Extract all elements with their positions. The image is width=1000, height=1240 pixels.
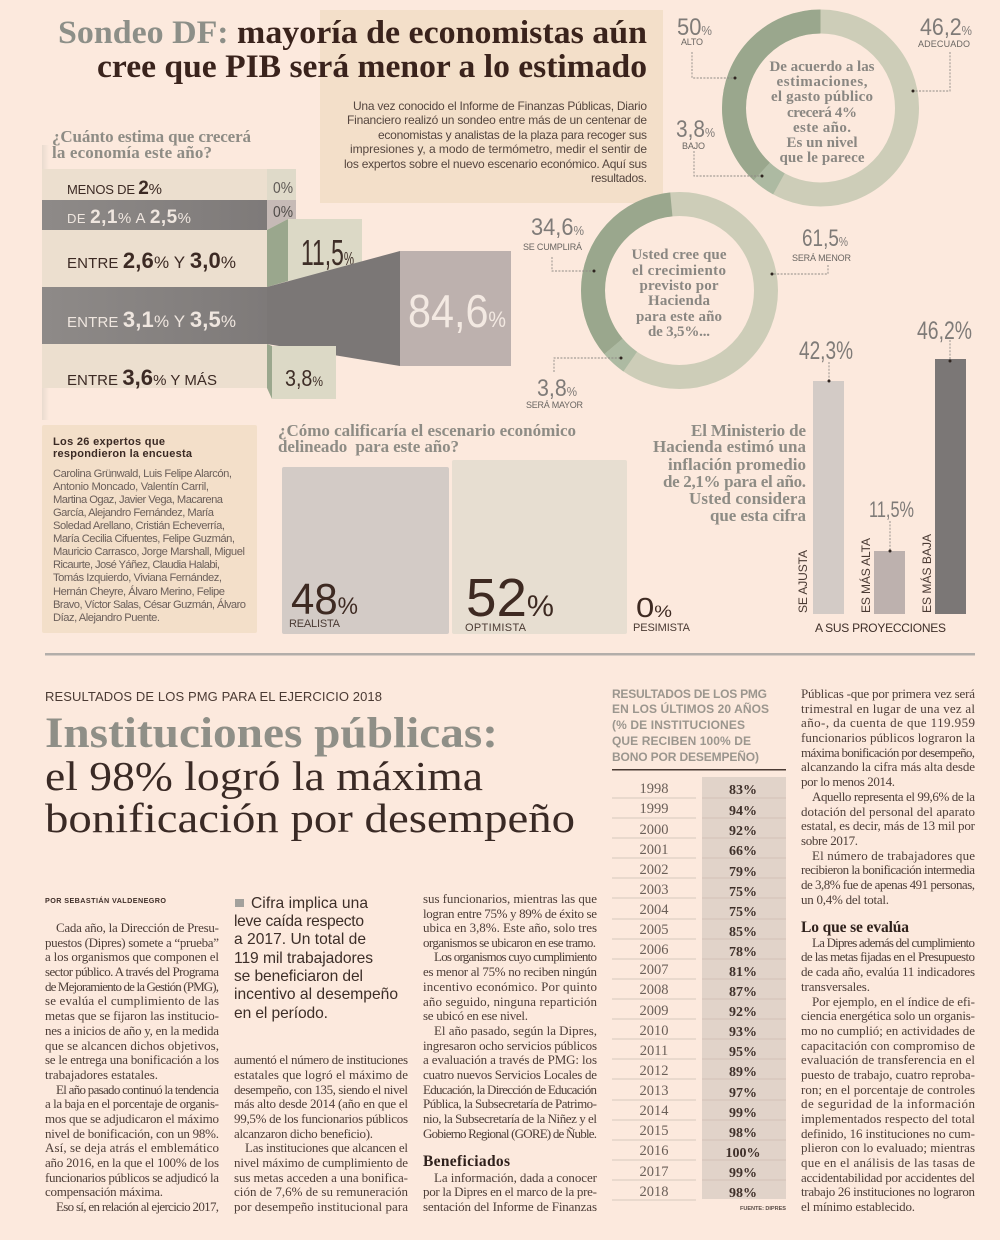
table values: 93% [729, 1025, 757, 1040]
expertos names [53, 468, 246, 624]
article column 4: recibieron la bonificación intermedia [801, 862, 975, 877]
panel: intro box [320, 10, 663, 203]
table years: 2011 [640, 1043, 668, 1059]
table values: 98% [729, 1186, 757, 1201]
article column 4: el mínimo establecido. [801, 1199, 915, 1214]
donut centre text: previsto por [640, 278, 719, 294]
article column 3: ubica en 3,8%. Este año, solo tres [423, 920, 597, 935]
article column 4: Aquello representa el 99,6% de la [812, 789, 975, 804]
article column 4: de seguridad de la información [801, 1096, 976, 1111]
article column 4: mo no cumplió; en actividades de [801, 1023, 975, 1038]
byline: POR SEBASTIÁN VALDENEGRO [45, 896, 166, 905]
expertos names: Mauricio Carrasco, Jorge Marshall, Miguel [53, 546, 245, 558]
article column 4: estatal, es decir, más de 13 mil por [801, 818, 976, 833]
intro text: resultados. [591, 171, 647, 185]
article column 4: funcionarios públicos lograron la [801, 730, 975, 745]
bar: se ajusta [796, 337, 853, 614]
label: pesimista: 0% [636, 592, 672, 623]
table heading [612, 687, 769, 764]
bar: es más alta: 11,5% [869, 497, 914, 522]
row: 2,1 a 2,5: 0% [273, 204, 293, 221]
label: será mayor [526, 375, 584, 410]
article column 2 [234, 1052, 408, 1214]
table heading: (% DE INSTITUCIONES [612, 718, 745, 732]
donut centre text: Usted cree que [632, 247, 727, 263]
article column 4: de 3,8% fue de apenas 491 personas, [801, 877, 975, 892]
article column 4: El número de trabajadores que [812, 848, 975, 863]
article column 3: cuatro nuevos Servicios Locales de [423, 1067, 597, 1082]
article column 4: sobre 2017. [801, 833, 858, 848]
table heading: RESULTADOS DE LOS PMG [612, 687, 767, 701]
leader lines [552, 257, 828, 372]
row: 3,1 y 3,5: ENTRE 3,1% Y 3,5% [67, 307, 236, 332]
article column 2: Las instituciones que alcancen el [245, 1140, 408, 1155]
donut centre text: Es un nivel [786, 135, 858, 151]
headline: el 98% logró la máxima [45, 753, 483, 799]
article column 4: por lo menos 2014. [801, 774, 895, 789]
title [58, 15, 647, 85]
row: 3,6 y más [42, 344, 336, 399]
expertos heading [53, 436, 193, 460]
bar: es más baja: ES MÁS BAJA [919, 534, 934, 613]
label: se cumplirá: SE CUMPLIRÁ [523, 242, 582, 252]
table values: 79% [729, 865, 757, 880]
donut centre text: De acuerdo a las [770, 59, 875, 75]
label: se cumplirá: 34,6% [531, 214, 584, 241]
callout: 119 mil trabajadores [234, 950, 373, 967]
article column 4 [801, 686, 976, 1214]
label: será menor: 61,5% [802, 225, 848, 252]
article column 3: se ubicó en ese nivel. [423, 1008, 528, 1023]
expertos names: García, Alejandro Fernández, María [53, 507, 215, 519]
row: 2,1 a 2,5 [42, 200, 296, 230]
callout: leve caída respecto [234, 913, 364, 930]
heading: inflation question [653, 421, 806, 525]
expertos names: María Cecilia Cifuentes, Felipe Guzmán, [53, 533, 235, 545]
table years [640, 781, 669, 1200]
box: optimista [452, 460, 627, 634]
article column 1: compensación máxima. [45, 1184, 163, 1199]
table values: 78% [729, 945, 757, 960]
table years: 2014 [640, 1103, 669, 1119]
article column 1: sector público. A través del Programa [45, 964, 219, 979]
table years: 2016 [640, 1143, 668, 1159]
donut centre text: el crecimiento [632, 263, 726, 279]
table values: 97% [729, 1086, 757, 1101]
table years: 2001 [640, 842, 668, 858]
article column 4: Por ejemplo, en el índice de efi- [812, 994, 975, 1009]
article column 1: a los organismos que componen el [45, 949, 219, 964]
bar: es más alta [858, 497, 914, 614]
table heading: BONO POR DESEMPEÑO) [612, 749, 759, 764]
table years: 1999 [640, 801, 668, 817]
row: 3,1 y 3,5 [42, 251, 511, 366]
table years: 2013 [640, 1083, 668, 1099]
table years: 2008 [640, 982, 668, 998]
box: realista: REALISTA [289, 618, 341, 630]
expertos heading: Los 26 expertos que [53, 436, 165, 448]
label: alto: ALTO [681, 37, 703, 47]
label: alto: 50% [677, 14, 712, 41]
article column 4: alcanzando la cifra más alta desde [801, 759, 975, 774]
article column 1: Cada año, la Dirección de Presu- [56, 920, 219, 935]
title: cree que PIB será menor a lo estimado [97, 49, 647, 85]
donut centre text: crecerá 4% [787, 105, 857, 121]
box: realista: 48% [291, 575, 358, 624]
article column 1 [45, 920, 219, 1214]
table values: 98% [729, 1126, 757, 1141]
table heading: QUE RECIBEN 100% DE [612, 734, 751, 748]
expertos names: Hernán Cheyre, Álvaro Merino, Felipe [53, 585, 225, 598]
table values: 75% [729, 885, 757, 900]
article column 4: año-, da cuenta de que 119.959 [801, 715, 975, 730]
article column 4: Lo que se evalúa [801, 919, 909, 936]
label: adecuado: 46,2% [920, 14, 972, 41]
article column 4: plieron con lo evaluado; mientras [801, 1140, 975, 1155]
expertos names: Ricaurte, José Yáñez, Claudia Halabi, [53, 559, 220, 571]
article column 2: sus metas acceden a una bonifica- [234, 1170, 408, 1185]
article column 3: año seguido, ninguna repartición [423, 994, 598, 1009]
table: resultados PMG [612, 687, 786, 1212]
row: 3,1 y 3,5: 84,6% [408, 285, 506, 337]
donut centre text: Hacienda [648, 293, 710, 309]
table values: 75% [729, 905, 757, 920]
row: 2,6 y 3,0 [42, 219, 362, 287]
table years: 2009 [640, 1003, 668, 1019]
article column 3: Beneficiados [423, 1153, 510, 1170]
article column 2: desempeño, con 135, siendo el nivel [234, 1082, 408, 1097]
label: será menor [792, 225, 852, 263]
intro text: economistas y analistas de la plaza para recoger sus [378, 128, 647, 142]
donut centre text: estimaciones, [776, 74, 868, 90]
donut centre text: para este año [636, 309, 722, 325]
donut centre text [770, 59, 875, 166]
article column 4: implementados respecto del total [801, 1111, 975, 1126]
article column 3: sentación del Informe de Finanzas [423, 1199, 597, 1214]
article column 4: trabajo 26 instituciones no lograron [801, 1184, 976, 1199]
heading: inflation question: que esta cifra [710, 506, 806, 525]
heading: scenario question [278, 421, 576, 456]
article column 3 [423, 891, 598, 1214]
expertos names: Díaz, Alejandro Puente. [53, 612, 160, 624]
headline [45, 710, 575, 841]
label: adecuado: ADECUADO [918, 39, 970, 49]
chart: scenario area bars [282, 460, 691, 634]
label: pesimista: PESIMISTA [633, 622, 691, 634]
expertos names: Bravo, Víctor Salas, César Guzmán, Álvaro [53, 598, 246, 611]
chart: inflation bars [796, 317, 972, 635]
article column 3: El año pasado, según la Dipres, [434, 1023, 597, 1038]
article column 4: ciencia energética solo un organis- [801, 1008, 975, 1023]
table values: 92% [729, 824, 757, 839]
table years: 2015 [640, 1123, 668, 1139]
article column 1: mos que se adjudicaron el máximo [45, 1111, 219, 1126]
label: pesimista [633, 592, 691, 634]
chart: donut gasto público [676, 14, 972, 194]
heading: growth question: ¿Cuánto estima que crecerá [52, 127, 252, 146]
kicker: RESULTADOS DE LOS PMG PARA EL EJERCICIO 2018 [45, 689, 382, 704]
article column 1: nes a inicios de año y, en la medida [45, 1023, 219, 1038]
table values: 81% [729, 965, 757, 980]
article column 4: de las metas fijadas en el Presupuesto [801, 949, 975, 964]
article column 3: Educación, la Dirección de Educación [423, 1082, 598, 1097]
expertos names: Martina Ogaz, Javier Vega, Macarena [53, 494, 224, 506]
expertos names: Carolina Grünwald, Luis Felipe Alarcón, [53, 468, 232, 480]
article column 3: logran entre 75% y 89% de éxito se [423, 906, 597, 921]
table years: 2017 [640, 1164, 668, 1180]
article column 3: organismos se ubicaron en ese tramo. [423, 935, 596, 950]
row: menos de 2% [42, 169, 296, 200]
bar: se ajusta: 42,3% [799, 337, 853, 365]
article column 3: Los organismos cuyo cumplimiento [434, 949, 597, 964]
table years: 2012 [640, 1063, 668, 1079]
table heading: EN LOS ÚLTIMOS 20 AÑOS [612, 701, 769, 716]
table years: 2006 [640, 942, 668, 958]
article column 2: 99,5% de los funcionarios públicos [234, 1111, 408, 1126]
donut centre text: el gasto público [771, 89, 873, 105]
row: 2,6 y 3,0: 11,5% [301, 232, 354, 273]
table values: 95% [729, 1045, 757, 1060]
callout [234, 895, 398, 1022]
expertos heading: respondieron la encuesta [53, 448, 193, 460]
article column 2: alcanzaron dicho beneficio). [234, 1126, 373, 1141]
intro text: Financiero realizó un sondeo entre más de un centenar de [347, 113, 647, 127]
box: optimista: OPTIMISTA [465, 622, 527, 634]
heading: scenario question: delineado para este año? [278, 437, 459, 456]
label: será menor: SERÁ MENOR [792, 253, 852, 263]
article column 2: nivel máximo de cumplimiento de [234, 1155, 408, 1170]
left shadow [42, 145, 49, 420]
article column 3: ingresaron ocho servicios públicos [423, 1038, 597, 1053]
table values: 66% [729, 844, 757, 859]
callout: se beneficiaron del [234, 968, 363, 985]
article column 1: El año pasado continuó la tendencia [56, 1082, 219, 1097]
article column 2: aumentó el número de instituciones [234, 1052, 408, 1067]
label: será mayor: SERÁ MAYOR [526, 400, 584, 410]
row: 2,1 a 2,5: DE 2,1% A 2,5% [67, 207, 191, 228]
bar: se ajusta: SE AJUSTA [796, 550, 810, 613]
article column 1: se evalúa el cumplimiento de las [45, 993, 219, 1008]
article column 4: definido, 16 instituciones no cum- [801, 1126, 975, 1141]
table years: 2002 [640, 862, 668, 878]
bar: es más baja [917, 317, 972, 614]
intro text: Una vez conocido el Informe de Finanzas Públicas, Diario [353, 99, 647, 113]
article column 3: La información, dada a conocer [434, 1170, 598, 1185]
row: 3,6 y más: ENTRE 3,6% Y MÁS [67, 365, 217, 390]
heading: inflation question: El Ministerio de [691, 421, 806, 440]
article column 4: máxima bonificación por desempeño, [801, 745, 975, 760]
table values: 92% [729, 1005, 757, 1020]
article column 1: se le entrega una bonificación a los [45, 1052, 219, 1067]
table values: 99% [729, 1166, 757, 1181]
article column 3: es menor al 75% no reciben ningún [423, 964, 598, 979]
table values: 100% [726, 1146, 760, 1161]
table years: 2003 [640, 882, 668, 898]
expertos names: Tomás Izquierdo, Viviana Fernández, [53, 572, 222, 584]
donut centre text [632, 247, 727, 340]
article column 1: nivel de bonificación, con un 98%. [45, 1126, 219, 1141]
table source: FUENTE: DIPRES [740, 1206, 786, 1212]
bar: es más alta: ES MÁS ALTA [858, 538, 873, 613]
intro text: los expertos sobre el nuevo escenario económico. Aquí sus [344, 157, 647, 171]
label: se cumplirá [523, 214, 584, 252]
table years: 2000 [640, 822, 668, 838]
row: 2,6 y 3,0: ENTRE 2,6% Y 3,0% [67, 248, 236, 273]
article column 1: puestos (Dipres) somete a “prueba” [45, 935, 219, 950]
row: menos de 2%: MENOS DE 2% [67, 178, 162, 199]
expertos names: Antonio Moncado, Valentín Carril, [53, 481, 209, 493]
callout: a 2017. Un total de [234, 931, 366, 948]
article column 3: incentivo económico. Por quinto [423, 979, 597, 994]
article column 3: Gobierno Regional (GORE) de Ñuble. [423, 1126, 597, 1141]
table values: 83% [729, 783, 757, 798]
table values: 87% [729, 985, 757, 1000]
article column 4: evaluación de transferencia en el [801, 1052, 975, 1067]
article column 4: que en el análisis de las tasas de [801, 1155, 975, 1170]
chart: donut crecimiento [523, 204, 852, 410]
article column 1: año 2016, en la que el 100% de los [45, 1155, 219, 1170]
heading: inflation question: Hacienda estimó una [653, 437, 806, 456]
article column 3: sus funcionarios, mientras las que [423, 891, 597, 906]
article column 1: trabajadores estatales. [45, 1067, 158, 1082]
table years: 2007 [640, 962, 668, 978]
bar: es más baja: 46,2% [917, 317, 972, 345]
table years: 1998 [640, 781, 668, 797]
leader lines [692, 52, 950, 178]
expertos names: Soledad Arellano, Cristián Echeverría, [53, 520, 225, 532]
article column 1: Así, se deja atrás el emblemático [45, 1140, 219, 1155]
article column 2: ción de 7,6% de su remuneración [234, 1184, 408, 1199]
article column 4: un 0,4% del total. [801, 892, 889, 907]
article column 1: que se alcancen dichos objetivos, [45, 1038, 219, 1053]
title: Sondeo DF: mayoría de economistas aún [58, 15, 647, 51]
article column 1: metas que se fijaron las institucio- [45, 1008, 219, 1023]
article column 4: La Dipres además del cumplimiento [812, 935, 975, 950]
callout: Cifra implica una [251, 895, 368, 912]
callout: en el período. [234, 1005, 328, 1022]
chart: growth funnel [42, 145, 511, 420]
article column 4: ron; en el porcentaje de controles [801, 1082, 975, 1097]
table values [726, 783, 760, 1201]
heading: inflation question: inflación promedio [668, 455, 806, 474]
article column 1: funcionarios públicos se adjudicó la [45, 1170, 219, 1185]
article column 4: capacitación con compromiso de [801, 1038, 975, 1053]
box: realista [282, 467, 449, 634]
table values: 94% [729, 804, 757, 819]
label: bajo: BAJO [682, 141, 705, 151]
headline: Instituciones públicas: [45, 710, 498, 757]
headline: bonificación por desempeño [45, 795, 575, 841]
article column 4: de cada año, evalúa 11 indicadores [801, 964, 975, 979]
article column 4: dotación del personal del aparato [801, 804, 975, 819]
table years: 2018 [640, 1184, 668, 1200]
table years: 2005 [640, 922, 668, 938]
donut centre text: este año. [793, 120, 851, 136]
article column 3: nio, la Subsecretaría de la Niñez y el [423, 1111, 597, 1126]
table values: 85% [729, 925, 757, 940]
panel: expertos [42, 425, 257, 633]
table values: 99% [729, 1106, 757, 1121]
table years: 2010 [640, 1023, 668, 1039]
heading: inflation question: de 2,1% para el año. [663, 472, 806, 491]
article column 1: de Mejoramiento de la Gestión (PMG), [45, 979, 219, 994]
article column 3: Pública, la Subsecretaría de Patrimo- [423, 1096, 597, 1111]
article column 1: Eso sí, en relación al ejercicio 2017, [56, 1199, 219, 1214]
box: optimista: 52% [466, 568, 554, 628]
article column 2: más alto desde 2014 (año en que el [234, 1096, 408, 1111]
label: será mayor: 3,8% [537, 375, 577, 402]
intro text [344, 99, 647, 185]
intro text: impresiones y, a modo de termómetro, medir el sentir de [350, 142, 647, 156]
donut centre text: de 3,5%... [648, 324, 710, 340]
table years: 2004 [640, 902, 669, 918]
axis caption: A SUS PROYECCIONES [815, 621, 946, 635]
article column 4: Públicas -que por primera vez será [801, 686, 975, 701]
heading: scenario question: ¿Cómo calificaría el escenario económico [278, 421, 576, 440]
heading: growth question: la economía este año? [52, 143, 212, 162]
donut centre text: que le parece [780, 150, 865, 166]
article column 1: a la baja en el porcentaje de organis- [45, 1096, 219, 1111]
article column 4: trimestral en lugar de una vez al [801, 701, 975, 716]
article column 4: accidentabilidad por accidentes del [801, 1170, 975, 1185]
article column 4: transversales. [801, 979, 870, 994]
table values: 89% [729, 1065, 757, 1080]
callout: incentivo al desempeño [234, 986, 398, 1003]
heading: inflation question: Usted considera [689, 489, 806, 508]
label: bajo: 3,8% [676, 116, 715, 143]
article column 2: por desempeño institucional para [234, 1199, 408, 1214]
article column 3: por la Dipres en el marco de la pre- [423, 1184, 597, 1199]
article column 4: puesto de trabajo, cuatro reproba- [801, 1067, 975, 1082]
row: 3,6 y más: 3,8% [285, 365, 323, 391]
article column 2: estatales que logró el máximo de [234, 1067, 408, 1082]
row: menos de 2%: 0% [273, 180, 293, 197]
article column 3: a evaluación a través de PMG: los [423, 1052, 597, 1067]
heading: growth question [52, 127, 252, 162]
